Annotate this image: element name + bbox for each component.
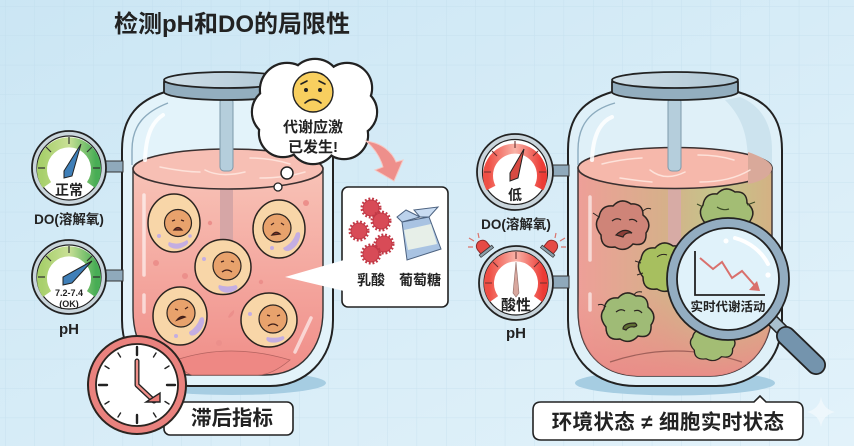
gauge label: 低: [508, 187, 522, 203]
left jar shadow: [138, 371, 326, 395]
cell 5: [241, 293, 297, 347]
lens label: 实时代谢活动: [690, 299, 766, 314]
panel: right bioreactor jar: [568, 72, 782, 386]
glass shading: [725, 97, 772, 168]
arrow to callout: [366, 141, 403, 181]
conclusion label: [533, 396, 803, 440]
liquid surface: [133, 149, 323, 189]
needle: [510, 149, 524, 181]
gauge label: 正常: [55, 182, 83, 198]
surface ripples: [160, 158, 305, 178]
lagging indicator label: [164, 402, 293, 435]
callout: lactate and glucose: [285, 187, 448, 307]
connector: [552, 276, 569, 288]
title: 检测pH和DO的局限性: [114, 10, 350, 38]
stressed cell: brown: [593, 201, 651, 249]
lid: [164, 72, 290, 100]
gauge: DO low: [477, 134, 569, 210]
jar glass body: [568, 92, 782, 386]
glass highlight: [145, 115, 163, 160]
needle: [513, 262, 519, 297]
magnifying glass: [667, 218, 816, 365]
lagging indicator label: 滞后指标: [191, 407, 273, 430]
stressed cell: green top: [697, 189, 755, 237]
cell 3: [195, 240, 251, 294]
stressed cell: green lower left: [598, 292, 654, 341]
icon: worried face: [293, 72, 333, 112]
liquid highlights: [144, 195, 311, 352]
chart: falling metabolic activity: [695, 251, 765, 295]
connector: [552, 165, 569, 176]
surface ripples: [602, 155, 750, 182]
panel: left bioreactor jar: [122, 72, 333, 386]
clock: [88, 336, 186, 434]
stressed cell: green lower right: [690, 326, 735, 361]
conclusion label: 环境状态 ≠ 细胞实时状态: [552, 410, 785, 434]
callout: lactate and glucose: 葡萄糖: [399, 272, 441, 288]
stirrer shaft: [220, 98, 233, 171]
lens: [667, 218, 789, 340]
stirrer shaft submerged: [668, 188, 681, 248]
gauge: DO normal: [32, 131, 123, 205]
gauge: pH acidic: [479, 246, 569, 320]
stirrer shaft submerged: [220, 185, 233, 243]
pH label: pH: [59, 321, 79, 338]
connector: [105, 161, 123, 172]
liquid surface: [578, 148, 772, 188]
callout labels: 乳酸: [357, 272, 385, 288]
lid: [612, 72, 738, 100]
DO label: DO(溶解氧): [481, 216, 551, 232]
small bubbles: [281, 167, 293, 179]
liquid: [578, 168, 772, 376]
bottom shading: [610, 351, 742, 362]
thought bubble: [252, 59, 377, 191]
right jar shadow: [575, 370, 775, 396]
gauge label: 酸性: [501, 296, 531, 314]
stressed cell: green middle: [635, 243, 691, 291]
clock hands: [137, 361, 154, 401]
icon: lactic acid germs: [350, 199, 393, 263]
cell 4: [153, 287, 207, 345]
callout pointer: [285, 260, 344, 291]
pink particles: [153, 200, 309, 346]
DO label: DO(溶解氧): [34, 211, 104, 227]
icon: sparkle: [807, 397, 835, 427]
thought bubble: 已发生!: [288, 138, 338, 156]
connector: [105, 270, 123, 281]
alarm lights: [468, 233, 566, 257]
gauge: pH normal: (OK): [59, 299, 79, 309]
cell 1: [148, 194, 200, 252]
glass highlight: [592, 117, 612, 160]
bubble text: 代谢应激: [283, 118, 343, 136]
cell 2: [253, 200, 305, 258]
stirrer shaft: [668, 98, 681, 171]
gauge reading: 7.2-7.4: [55, 288, 83, 298]
liquid: [133, 168, 323, 375]
handle: [771, 319, 786, 334]
pH label: pH: [506, 325, 526, 342]
jar glass body: [122, 92, 333, 386]
icon: glucose bag: [397, 207, 441, 260]
needle: [64, 144, 81, 178]
liquid bottom shading: [176, 351, 290, 375]
needle: [63, 261, 92, 285]
gauge: pH normal: [32, 240, 123, 314]
